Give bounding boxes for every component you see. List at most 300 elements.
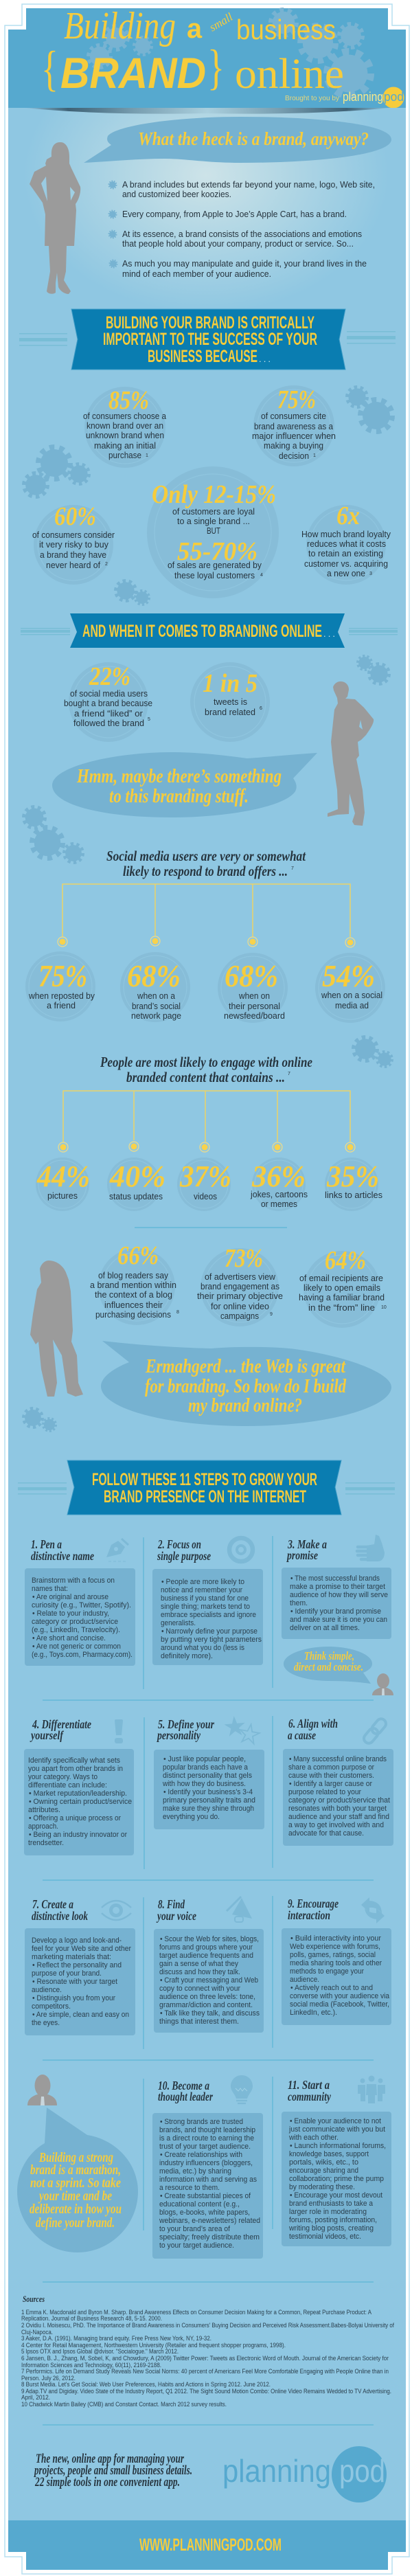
stat: 22%: 22%: [89, 662, 130, 691]
stat: 75%: [252, 385, 336, 466]
step 5: define your personality: make sure they shine through: [163, 1805, 254, 1813]
step 6: align with a cause: • Identify a larger cause or: [289, 1780, 372, 1788]
stat: 68% social network page: 68%: [127, 958, 181, 993]
stat: 36% jokes: jokes, cartoons: [250, 1190, 308, 1199]
speech bubble: marathon: deliberate in how you: [30, 2202, 122, 2217]
promo text: projects, people and small business details.: [34, 2463, 192, 2478]
step 9: encourage interaction: interaction: [288, 1908, 330, 1922]
step 10: become a thought leader: to your brand’s area of: [159, 2225, 231, 2233]
step 9: encourage interaction: media sharing tools and other: [290, 1959, 382, 1967]
chart: social media offers: [25, 848, 385, 1023]
bulleted text block: [108, 180, 375, 279]
stat: 85%: known brand over an: [87, 421, 163, 431]
step 8: find your voice: grammar/diction and content.: [159, 2001, 253, 2009]
step 11: start a community: writing blog posts, creating: [288, 2224, 374, 2233]
stat: 85%: purchase: [108, 451, 141, 460]
stat: 60%: [32, 502, 115, 585]
step 10: become a thought leader: media, etc.) by sharing: [159, 2167, 231, 2176]
step 7: create a distinctive look: • Distinguish you from your: [32, 1994, 115, 2002]
step 5: define your personality: personality: [156, 1728, 201, 1742]
title: BRAND: [60, 49, 206, 98]
step 5: define your personality: with how they do business.: [162, 1780, 246, 1788]
step 2: focus on single purpose: single purpose: [157, 1549, 211, 1563]
stat: 6x: reduces what it costs: [307, 539, 386, 549]
step 11: start a community: knowledge bases, support: [289, 2150, 369, 2158]
stat: 54% social media ad: media ad: [335, 1001, 369, 1010]
stat: 68% social network page: when on a: [137, 991, 175, 1001]
stat: 66%: of blog readers say: [98, 1271, 169, 1280]
title: small: [207, 10, 235, 34]
stat: 60%: never heard of: [46, 561, 101, 570]
speech bubble: what the heck: [84, 117, 391, 163]
step 1: pen a distinctive name: (e.g., Toys.com, Pharmacy.com).: [32, 1651, 133, 1659]
step 11: start a community: brand enthusiasts to take a: [289, 2200, 374, 2208]
step 7: create a distinctive look: • Resonate with your target: [32, 1978, 117, 1986]
stat: 40% status updates: 40%: [109, 1160, 165, 1193]
step 7: create a distinctive look: audience.: [32, 1986, 62, 1994]
title: [41, 5, 344, 98]
stat: 64%: having a familiar brand: [299, 1293, 385, 1302]
step 9: encourage interaction: • Build interactivity into your: [290, 1934, 381, 1943]
speech bubble: think simple: direct and concise.: [294, 1660, 363, 1673]
step 7: create a distinctive look: competitors.: [32, 2002, 71, 2011]
stat: only 12-15% and 55-70%: of sales are generated by: [168, 561, 262, 570]
stat: 64%: likely to open emails: [304, 1283, 380, 1293]
stat: 44% pictures: 44%: [36, 1160, 90, 1193]
speech bubble: marathon: brand is a marathon,: [30, 2162, 121, 2178]
planningpod logo: pod: [339, 2453, 385, 2489]
stat: only 12-15% and 55-70%: 4: [260, 573, 263, 578]
sources: Information Sciences and Technology, 60(11), 2169-2188.: [21, 2362, 161, 2369]
stat: 66%: purchasing decisions: [95, 1310, 171, 1320]
step 11: start a community: encourage sharing and: [289, 2167, 358, 2175]
credit: brought to you by planningpod: Brought to you by: [285, 94, 340, 102]
step 11: start a community: with each other.: [288, 2134, 339, 2142]
stat: 85%: making an initial: [94, 441, 156, 451]
icon: people: [358, 2076, 385, 2103]
step 10: become a thought leader: educational content (e.g.,: [159, 2200, 240, 2208]
stat: 73%: their primary objective: [197, 1291, 283, 1301]
stat: 36% jokes: 36%: [251, 1160, 306, 1193]
step 8: find your voice: 8. Find: [158, 1897, 185, 1911]
heading: Social media users are very or somewhat: [106, 848, 306, 864]
step 8: find your voice: • Talk like they talk, and discuss: [160, 2009, 260, 2018]
step 6: align with a cause: [283, 1717, 393, 1846]
stat: 40% status updates: [107, 1157, 165, 1211]
stat: 73%: [197, 1244, 283, 1326]
step 10: become a thought leader: blogs, e-books, white papers,: [159, 2208, 250, 2217]
step 8: find your voice: your voice: [157, 1909, 196, 1923]
stat: 73%: brand engagement as: [201, 1282, 279, 1291]
step 9: encourage interaction: LinkedIn, etc.).: [290, 2009, 337, 2017]
stat: 1 in 5: brand related: [205, 708, 255, 717]
stat: 73%: of advertisers view: [205, 1272, 276, 1282]
step 10: become a thought leader: webinars, e-newsletters) related: [159, 2217, 260, 2225]
stat: 66%: 66%: [117, 1241, 159, 1270]
sources: 1 Emma K. Macdonald and Byron M. Sharp. Brand Awareness Effects on Consumer Decision Making for a Common, Repeat Purchase Product: A: [21, 2309, 371, 2316]
step 4: differentiate yourself: your category. Ways to: [28, 1773, 98, 1781]
decorative gears: [354, 1037, 392, 1067]
step 7: create a distinctive look: 7. Create a: [32, 1897, 73, 1911]
step 11: start a community: • Enable your audience to not: [290, 2117, 381, 2125]
header panel: [8, 5, 406, 109]
step 8: find your voice: discuss and how they talk.: [159, 1968, 240, 1976]
step 2: focus on single purpose: 2. Focus on: [157, 1537, 201, 1551]
step 8: find your voice: copy to connect with your: [159, 1985, 240, 1993]
step 7: create a distinctive look: feel for your Web site and other: [32, 1945, 131, 1953]
stat: 22%: 5: [148, 717, 150, 722]
step 10: become a thought leader: • Create relationships with: [160, 2151, 242, 2159]
stat: 66%: 8: [176, 1310, 179, 1315]
stat: 75% reposted: [25, 951, 95, 1021]
speech bubble: hmm: [52, 752, 317, 817]
bulleted text block: and customized beer koozies.: [122, 190, 231, 199]
promo text: 22 simple tools in one convenient app.: [34, 2475, 180, 2489]
stat: 68% newsfeed: their personal: [229, 1002, 280, 1011]
speech bubble: think simple: Think simple,: [304, 1649, 354, 1662]
stat: 36% jokes: or memes: [261, 1199, 297, 1209]
step 10: become a thought leader: 10. Become a: [158, 2079, 209, 2092]
icon: eye: [102, 1901, 131, 1920]
sources: 3 Aaker, D.A. (1991). Managing brand equity. Free Press New York, NY, 19-32.: [21, 2335, 211, 2342]
stat: 68% social network page: [120, 952, 190, 1022]
banner: building your brand: ...: [259, 354, 271, 364]
sources: 4 Center for Retail Management, Northwestern University (Retailer and frequent shopper programs, 1998).: [21, 2342, 286, 2349]
banner: building your brand: BUSINESS BECAUSE: [148, 347, 258, 366]
sources: April, 2012.: [21, 2394, 50, 2401]
stat: 68% newsfeed: [218, 953, 288, 1023]
step 6: align with a cause: share a common purpose or: [288, 1763, 374, 1772]
speech bubble: ermahgerd: Ermahgerd ... the Web is great: [145, 1356, 346, 1377]
step 1: pen a distinctive name: [25, 1537, 135, 1666]
stat: 68% newsfeed: newsfeed/board: [224, 1011, 285, 1021]
step 2: focus on single purpose: notice and remember your: [161, 1586, 242, 1594]
step 1: pen a distinctive name: Brainstorm with a focus on: [32, 1577, 115, 1585]
sources: Sources: [23, 2294, 45, 2304]
step 4: differentiate yourself: 4. Differentiate: [32, 1717, 91, 1731]
stat: 68% social network page: network page: [131, 1011, 181, 1021]
heading: [106, 848, 306, 879]
step 6: align with a cause: resonates with both your target: [288, 1805, 387, 1813]
stat: 36% jokes: [250, 1157, 308, 1211]
speech bubble: marathon: [17, 2108, 138, 2252]
speech bubble: marathon: your time and be: [38, 2189, 112, 2204]
promo text: [34, 2452, 192, 2489]
stat: only 12-15% and 55-70%: BUT: [207, 526, 220, 536]
step 7: create a distinctive look: distinctive look: [32, 1909, 88, 1923]
sources: 5 Ipsos OTX and Ipsos Global @dvisor. "Socialogue." March 2012.: [21, 2348, 179, 2355]
step 5: define your personality: 5. Define your: [158, 1717, 215, 1731]
promo text: The new, online app for managing your: [36, 2452, 184, 2466]
stat: 22%: of social media users: [70, 689, 148, 699]
step 2: focus on single purpose: around what you do (less is: [161, 1644, 244, 1652]
stat: 35% links: links to articles: [325, 1190, 382, 1200]
icon: target: [229, 1538, 253, 1561]
icon: person with tie: [372, 1673, 393, 1695]
stat: 35% links: 35%: [326, 1160, 379, 1193]
stat: 44% pictures: [36, 1157, 90, 1211]
step 9: encourage interaction: social media (Facebook, Twitter,: [290, 2000, 389, 2009]
icon: man silhouette: [328, 681, 374, 826]
heading: likely to respond to brand offers ...: [123, 863, 288, 879]
stat: 64%: 10: [381, 1305, 387, 1310]
stat: 6x: 6x: [336, 501, 360, 530]
banner: building your brand: [19, 309, 396, 370]
stat: 73%: 73%: [225, 1244, 263, 1273]
stat: 6x: customer vs. acquiring: [304, 559, 388, 569]
step 6: align with a cause: 6. Align with: [288, 1717, 338, 1730]
step 6: align with a cause: cause with their customers.: [288, 1772, 374, 1780]
stat: 6x: [301, 501, 391, 585]
stat: 75%: major influencer when: [252, 431, 336, 441]
stat: 37% videos: videos: [194, 1192, 217, 1201]
speech bubble: ermahgerd: [101, 1341, 391, 1426]
step 3: make a promise: audience of how they will serve: [290, 1591, 388, 1599]
stat: 64%: [299, 1246, 387, 1328]
stat: 75%: 75%: [277, 385, 316, 414]
stat: 60%: it very risky to buy: [39, 540, 109, 550]
step 10: become a thought leader: to your target audience.: [159, 2241, 234, 2250]
step 1: pen a distinctive name: category or product/service: [32, 1618, 118, 1626]
step 3: make a promise: • The most successful brands: [290, 1574, 380, 1583]
stat: 73%: 9: [270, 1312, 273, 1317]
section: what is a brand: [30, 117, 391, 294]
stat: 75%: decision: [279, 451, 309, 461]
step 8: find your voice: forums and groups where your: [159, 1943, 253, 1952]
step 1: pen a distinctive name: names that:: [32, 1585, 68, 1593]
step 1: pen a distinctive name: • Are original and arouse: [32, 1593, 108, 1601]
heading: [100, 1054, 312, 1085]
step 8: find your voice: audience on three levels: tone,: [159, 1993, 255, 2001]
icon: light bulb: [231, 2075, 253, 2103]
planningpod logo: [222, 2446, 387, 2502]
step 4: differentiate yourself: approach.: [28, 1822, 58, 1831]
step 11: start a community: • Launch informational forums,: [290, 2142, 386, 2150]
stat: 64%: 64%: [325, 1246, 366, 1275]
speech bubble: what the heck: What the heck is a brand, anyway?: [138, 128, 369, 149]
step 1: pen a distinctive name: distinctive name: [31, 1549, 94, 1563]
bulleted text block: A brand includes but extends far beyond your name, logo, Web site,: [122, 180, 375, 190]
stat: 66%: influences their: [104, 1300, 163, 1310]
bulleted text block: At its essence, a brand consists of the associations and emotions: [122, 229, 362, 239]
step 2: focus on single purpose: • Narrowly define your purpose: [161, 1627, 258, 1636]
step 3: make a promise: them.: [290, 1599, 308, 1607]
speech bubble: hmm: to this branding stuff.: [109, 786, 249, 807]
step 2: focus on single purpose: definitely more).: [161, 1652, 213, 1660]
step 7: create a distinctive look: • Reflect the personality and: [32, 1961, 122, 1969]
sources: Replication. Journal of Business Research 48, 5-15. 2000.: [21, 2315, 162, 2322]
stat: 75%: making a buying: [264, 441, 323, 451]
step 4: differentiate yourself: attributes.: [28, 1806, 60, 1814]
footer: [8, 2520, 406, 2570]
step 4: differentiate yourself: Identify specifically what sets: [28, 1756, 120, 1765]
stat: 60%: 2: [105, 562, 108, 567]
stat: 75% reposted: 75%: [38, 958, 87, 993]
step 4: differentiate yourself: • Offering a unique process or: [29, 1814, 121, 1822]
step 5: define your personality: • Just like popular people,: [163, 1755, 246, 1763]
stat: 1 in 5: 6: [260, 706, 262, 711]
stat: only 12-15% and 55-70%: of customers are loyal: [172, 507, 255, 517]
stat: 66%: a brand mention within: [90, 1280, 176, 1290]
heading: 7: [291, 866, 294, 871]
credit: brought to you by planningpod: [285, 87, 404, 109]
stat: 75% reposted: when reposted by: [28, 991, 95, 1001]
icon: swap arrows: [361, 1897, 385, 1923]
heading: branded content that contains ...: [126, 1069, 285, 1085]
step 10: become a thought leader: information with and serving as: [159, 2176, 257, 2184]
stat: only 12-15% and 55-70%: [147, 466, 279, 598]
stat: 40% status updates: status updates: [109, 1192, 163, 1201]
step 3: make a promise: promise: [286, 1548, 318, 1562]
stat: 22%: followed the brand: [73, 719, 144, 728]
step 1: pen a distinctive name: curiosity (e.g., Twitter, Spotify).: [32, 1601, 131, 1609]
icon: thumbs up: [357, 1535, 385, 1561]
step 10: become a thought leader: • Create substantial pieces of: [160, 2192, 251, 2200]
footer: WWW.PLANNINGPOD.COM: [139, 2535, 282, 2555]
step 9: encourage interaction: • Actively reach out to and: [290, 1984, 373, 1992]
step 1: pen a distinctive name: • Are short and concise.: [32, 1634, 106, 1642]
decorative gears: [23, 1408, 56, 1431]
stat: 73%: campaigns: [220, 1311, 259, 1321]
banner: and when it comes to branding online: ...: [323, 629, 335, 639]
stat: only 12-15% and 55-70%: Only 12-15%: [152, 480, 276, 509]
stat: 64%: in the “from” line: [308, 1303, 375, 1313]
icon: stars: [223, 1715, 261, 1744]
icon: megaphone: [227, 1897, 252, 1922]
decorative gears: [24, 656, 389, 863]
step 2: focus on single purpose: business if you stand for one: [161, 1594, 249, 1603]
step 9: encourage interaction: [282, 1897, 391, 2025]
step 11: start a community: larger role in moderating: [289, 2208, 367, 2216]
sources: [21, 2294, 394, 2408]
step 7: create a distinctive look: purpose of your brand.: [32, 1969, 102, 1978]
step 1: pen a distinctive name: 1. Pen a: [31, 1537, 62, 1551]
stat: 85%: unknown brand when: [86, 431, 164, 440]
stat: 54% social media ad: [315, 953, 385, 1023]
step 3: make a promise: make a promise to their target: [290, 1583, 385, 1591]
step 9: encourage interaction: Web experience with forums,: [290, 1943, 380, 1951]
stat: only 12-15% and 55-70%: to a single brand ...: [177, 517, 250, 526]
icon: woman silhouette 2: [30, 1261, 83, 1397]
step 2: focus on single purpose: generalists.: [161, 1619, 196, 1627]
step 8: find your voice: • Scour the Web for sites, blogs,: [160, 1935, 259, 1943]
stat: 68% newsfeed: 68%: [225, 958, 278, 993]
step 11: start a community: portals, wikis, etc., to: [289, 2158, 358, 2167]
step 1: pen a distinctive name: • Are not generic or common: [32, 1642, 121, 1651]
stat: 6x: 3: [369, 572, 372, 576]
stat: 68% social network page: brand’s social: [132, 1002, 181, 1011]
step 10: become a thought leader: trust of your target audience.: [159, 2143, 251, 2151]
icon: chain link: [362, 1717, 388, 1745]
step 4: differentiate yourself: you apart from other brands in: [28, 1765, 123, 1773]
stat: 54% social media ad: 54%: [322, 958, 375, 993]
step 7: create a distinctive look: the eyes.: [32, 2019, 60, 2027]
step 6: align with a cause: • Many successful online brands: [289, 1755, 387, 1763]
step 11: start a community: forums, posting information,: [289, 2216, 377, 2224]
step 8: find your voice: things that interest them.: [159, 2018, 239, 2026]
sources: 8 Burst Media. Let's Get Social: Web User Preferences, Habits and Actions in Spring 2012. June 2012.: [21, 2381, 271, 2388]
step 5: define your personality: popular brands each have a: [163, 1763, 249, 1772]
sources: Person. July 26, 2012.: [21, 2375, 76, 2382]
step 8: find your voice: gain a sense of what they: [159, 1960, 238, 1968]
stat: 1 in 5: [190, 662, 270, 742]
stat: 6x: a new one: [327, 569, 365, 578]
step 7: create a distinctive look: • Are simple, clean and easy on: [32, 2011, 129, 2019]
step 1: pen a distinctive name: (e.g., LinkedIn, Travelocity).: [32, 1626, 120, 1634]
step 9: encourage interaction: polls, games, ratings, social: [290, 1951, 376, 1959]
speech bubble: ermahgerd: my brand online?: [188, 1395, 302, 1416]
bulleted text block: that people hold about your company, product or service. So...: [122, 239, 354, 249]
step 5: define your personality: distinct personality that gels: [163, 1772, 252, 1780]
stat: 85%: 85%: [108, 386, 149, 415]
chart: engaging branded content: [36, 1054, 382, 1211]
step 7: create a distinctive look: [25, 1897, 135, 2035]
step 10: become a thought leader: a resource to them.: [159, 2184, 220, 2192]
speech bubble: hmm: Hmm, maybe there’s something: [76, 766, 282, 787]
step 3: make a promise: deliver on at all times.: [290, 1624, 360, 1632]
stat: 1 in 5: 1 in 5: [203, 669, 258, 698]
speech bubble: marathon: define your brand.: [36, 2215, 115, 2230]
credit: brought to you by planningpod: planning: [343, 90, 383, 104]
stat: only 12-15% and 55-70%: these loyal customers: [174, 571, 255, 580]
step 5: define your personality: • Identify your business’s 3-4: [163, 1788, 253, 1796]
section glow: [8, 108, 406, 310]
stat: 66%: [90, 1241, 179, 1325]
decorative gears: [24, 387, 392, 605]
step 6: align with a cause: purpose related to your: [288, 1788, 361, 1796]
icon: exclamation mark: [115, 1719, 123, 1743]
stat: 75% reposted: a friend: [47, 1001, 76, 1010]
stat: 22%: a friend “liked” or: [74, 709, 143, 719]
step 4: differentiate yourself: yourself: [30, 1728, 65, 1742]
step 4: differentiate yourself: • Owning certain product/service: [29, 1798, 132, 1806]
title: }: [207, 40, 225, 95]
step 10: become a thought leader: specialty; freely distribute them: [159, 2233, 260, 2241]
speech bubble: ermahgerd: for branding. So how do I build: [145, 1376, 347, 1397]
step 11: start a community: testimonial videos, etc.: [289, 2233, 361, 2241]
step 7: create a distinctive look: marketing materials that:: [32, 1953, 111, 1961]
title: business: [236, 14, 336, 45]
step 10: become a thought leader: brands, and thought leadership: [159, 2126, 255, 2134]
stat: 60%: a brand they have: [40, 550, 106, 560]
speech bubble: think simple: [284, 1647, 372, 1684]
stat: 22%: [64, 662, 152, 742]
stat: 85%: of consumers choose a: [83, 411, 166, 421]
step 6: align with a cause: a cause: [288, 1728, 316, 1742]
step 5: define your personality: [154, 1715, 264, 1829]
step 2: focus on single purpose: [152, 1537, 263, 1665]
step 8: find your voice: • Craft your messaging and Web: [160, 1976, 258, 1985]
step 2: focus on single purpose: single thing; markets tend to: [161, 1603, 250, 1611]
stat: 75%: 1: [313, 453, 316, 458]
step 11: start a community: community: [288, 2090, 332, 2103]
stat: only 12-15% and 55-70%: 55-70%: [177, 537, 258, 566]
bulleted text block: mind of each member of your audience.: [122, 269, 271, 279]
icon: person with tie 2: [27, 2075, 57, 2105]
step 10: become a thought leader: thought leader: [158, 2090, 214, 2103]
step 7: create a distinctive look: Develop a logo and look-and-: [32, 1936, 122, 1945]
step 2: focus on single purpose: • People are more likely to: [161, 1578, 244, 1586]
stat: 37% videos: [177, 1157, 231, 1211]
step 5: define your personality: everything you do.: [163, 1813, 220, 1821]
icon: woman silhouette: [30, 142, 80, 294]
speech bubble: marathon: Building a strong: [38, 2150, 113, 2165]
step 2: focus on single purpose: embrace specialists and ignore: [161, 1611, 256, 1619]
step 9: encourage interaction: 9. Encourage: [288, 1897, 339, 1910]
stat: 37% videos: 37%: [179, 1160, 231, 1193]
stat: 1 in 5: tweets is: [214, 697, 247, 707]
header shadow: [24, 108, 391, 114]
